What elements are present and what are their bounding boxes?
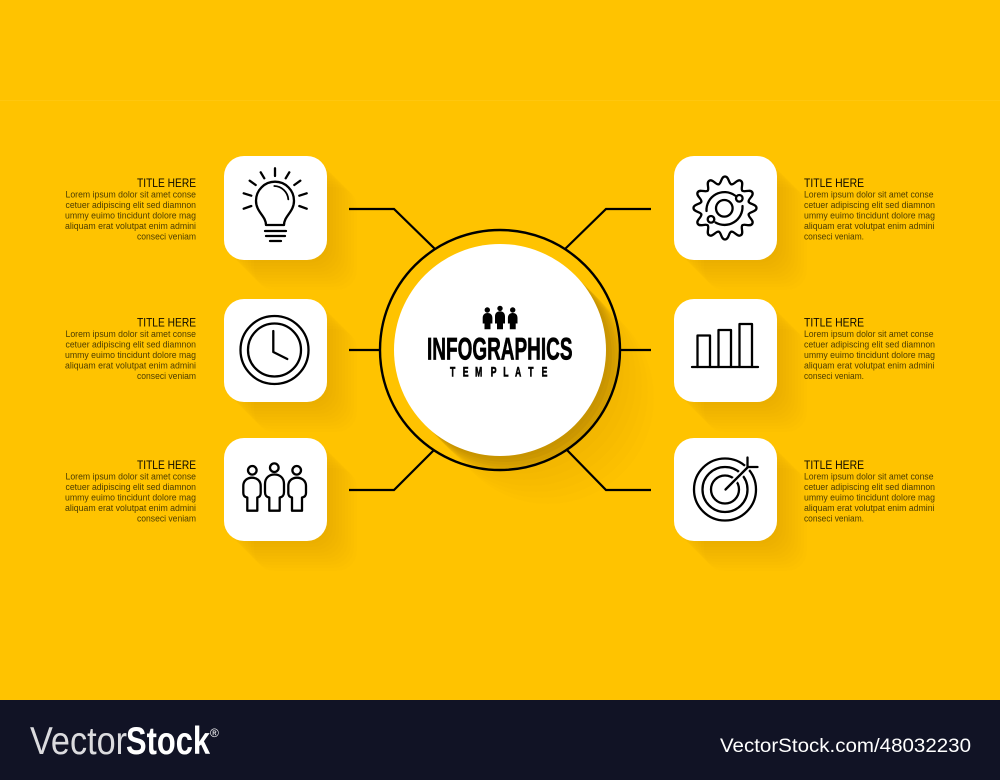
text block: left 2: ummy euimo tincidunt dolore mag: [65, 350, 196, 361]
central circle inner shadow: [431, 281, 619, 469]
footer logo: Vector: [30, 720, 127, 763]
text block: right 3: TITLE HERE: [804, 459, 864, 472]
text block: right 1: TITLE HERE: [804, 177, 864, 190]
text block: right 2: ummy euimo tincidunt dolore mag: [804, 350, 935, 361]
text block: right 3: Lorem ipsum dolor sit amet conse: [804, 472, 934, 482]
icon: target with arrow: [694, 458, 758, 520]
icon: three people solid: [483, 306, 518, 329]
text block: right 2: conseci veniam.: [804, 371, 864, 382]
text block: right 1: [804, 177, 935, 242]
text block: left 2: conseci veniam: [137, 371, 196, 382]
text block: left 1: ummy euimo tincidunt dolore mag: [65, 210, 196, 222]
text block: left 2: aliquam erat volutpat enim admini: [65, 360, 196, 372]
connector lines: [349, 209, 651, 490]
panel: target card right bottom: [674, 438, 807, 571]
footer url: VectorStock.com/48032230: [720, 735, 971, 757]
footer logo: Stock: [126, 720, 210, 763]
text block: left 3: Lorem ipsum dolor sit amet conse: [66, 472, 196, 482]
text block: right 1: cetuer adipiscing elit sed diamnon: [804, 200, 935, 211]
icon: light bulb: [244, 168, 307, 241]
text block: left 1: aliquam erat volutpat enim admini: [65, 221, 196, 232]
icon: three people outline: [243, 463, 306, 511]
text block: left 2: Lorem ipsum dolor sit amet conse: [66, 329, 196, 340]
panel: idea card left top: [224, 156, 357, 290]
icon: clock: [240, 316, 308, 384]
panel: clock card left middle: [224, 299, 357, 432]
text block: left 3: TITLE HERE: [137, 459, 196, 472]
text block: right 3: ummy euimo tincidunt dolore mag: [804, 492, 935, 504]
text block: left 2: TITLE HERE: [137, 316, 196, 330]
text block: left 1: TITLE HERE: [137, 177, 196, 190]
heading: infographics: INFOGRAPHICS: [427, 330, 572, 366]
central circle group: [349, 209, 654, 504]
text block: right 3: [804, 459, 935, 524]
text block: right 3: cetuer adipiscing elit sed diamnon: [804, 482, 935, 493]
text block: left 1: Lorem ipsum dolor sit amet conse: [66, 190, 196, 200]
text block: left 2: [65, 316, 196, 382]
text block: right 2: cetuer adipiscing elit sed diamnon: [804, 340, 935, 350]
footer bar: [0, 700, 1000, 780]
text block: right 3: conseci veniam.: [804, 514, 864, 524]
text block: right 2: TITLE HERE: [804, 316, 864, 330]
text block: right 2: [804, 316, 935, 382]
text block: right 3: aliquam erat volutpat enim admini: [804, 503, 934, 514]
text block: left 1: [65, 177, 196, 242]
white disc: [394, 244, 606, 456]
icon: gear with orbit: [694, 176, 756, 240]
text block: right 1: conseci veniam.: [804, 232, 864, 242]
text block: left 3: [65, 459, 196, 524]
panel: people card left bottom: [224, 438, 357, 571]
text block: right 2: Lorem ipsum dolor sit amet conse: [804, 329, 934, 340]
footer logo: ®: [210, 726, 219, 740]
central circle faint outer shadow: [400, 250, 654, 504]
subheading: template: TEMPLATE: [450, 365, 548, 380]
text block: right 2: aliquam erat volutpat enim admini: [804, 360, 934, 372]
text block: left 3: ummy euimo tincidunt dolore mag: [65, 492, 196, 504]
footer logo: [30, 720, 219, 763]
panel: chart card right middle: [674, 299, 807, 432]
text block: left 3: aliquam erat volutpat enim admini: [65, 503, 196, 514]
icon: bar chart: [692, 324, 758, 367]
text block: right 1: aliquam erat volutpat enim admini: [804, 221, 934, 232]
text block: left 1: cetuer adipiscing elit sed diamnon: [66, 200, 196, 211]
text block: right 1: Lorem ipsum dolor sit amet conse: [804, 190, 934, 200]
text block: left 1: conseci veniam: [137, 232, 196, 242]
text block: left 3: conseci veniam: [137, 514, 196, 524]
outer ring: [380, 230, 620, 470]
text block: left 2: cetuer adipiscing elit sed diamnon: [66, 340, 196, 350]
text block: left 3: cetuer adipiscing elit sed diamnon: [66, 482, 196, 493]
panel: gear card right top: [674, 156, 807, 290]
text block: right 1: ummy euimo tincidunt dolore mag: [804, 210, 935, 222]
